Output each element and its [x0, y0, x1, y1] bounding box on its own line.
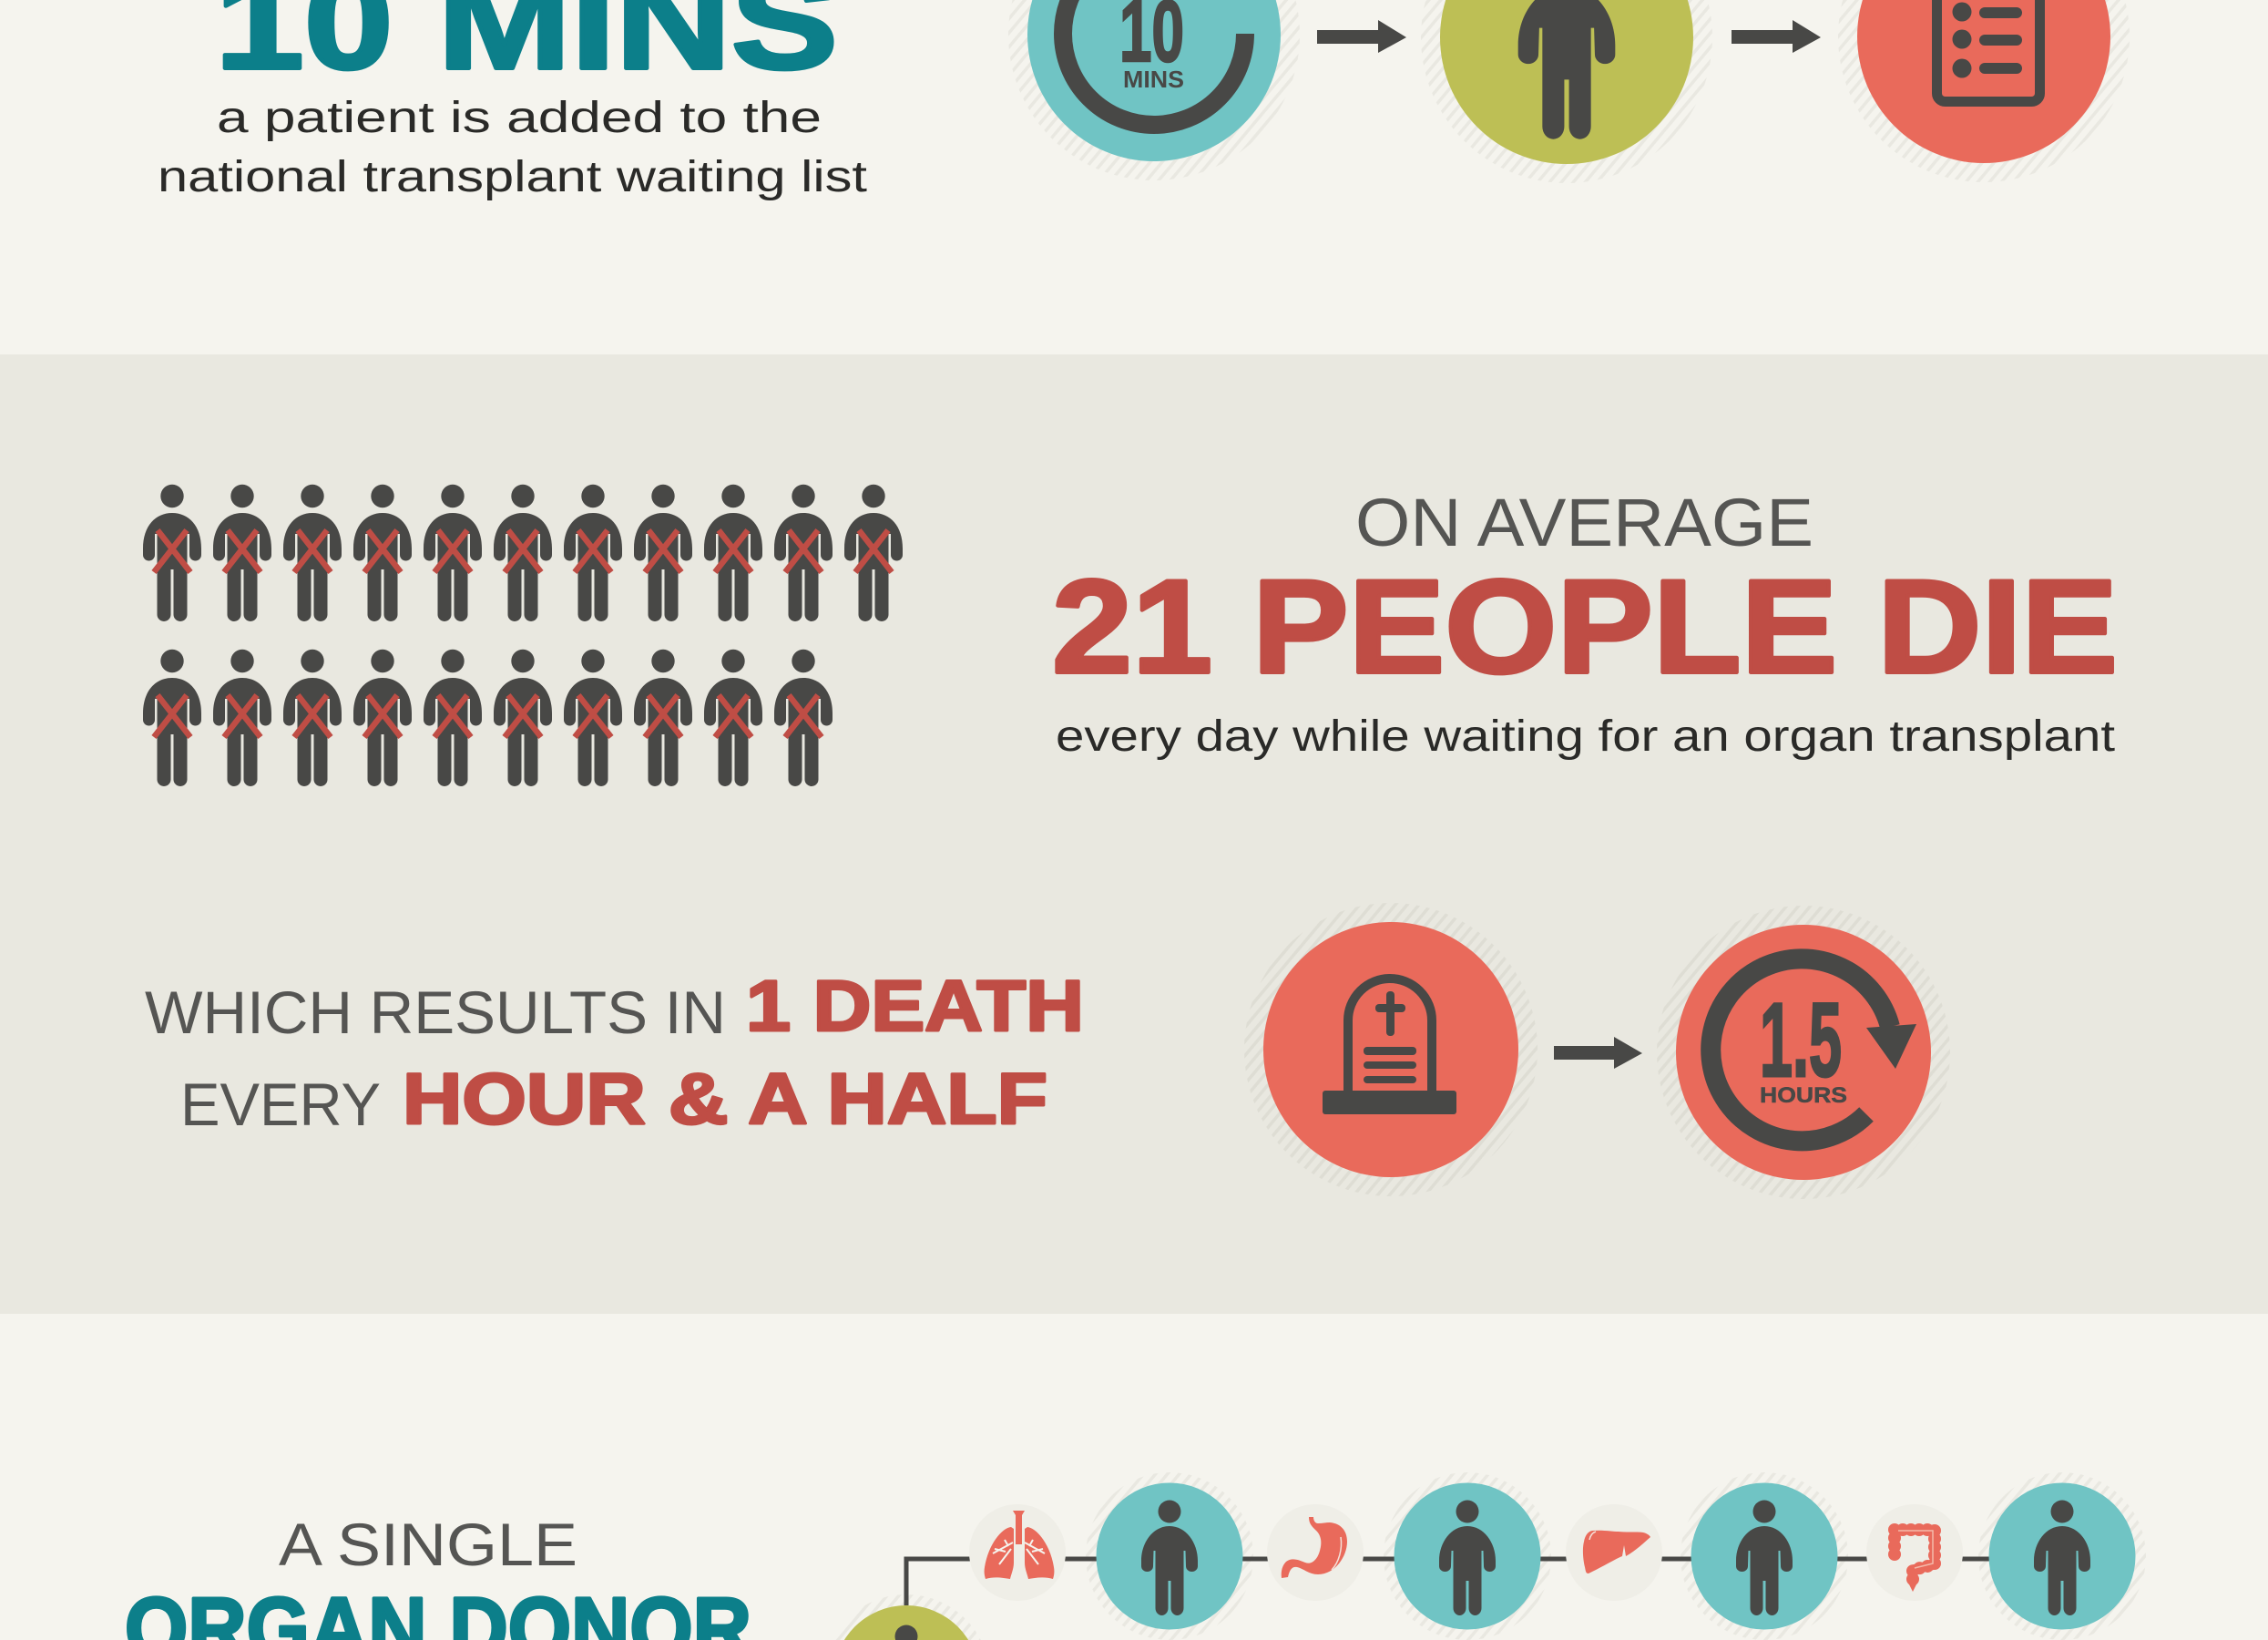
icon: 1.5 hours timer: 1.5	[1760, 982, 1842, 1099]
text: every day while waiting: every day while waiting for an organ transplant	[1056, 712, 2115, 761]
statement: one death every hour and a half: EVERY	[180, 1071, 381, 1138]
icon: stomach	[1267, 1504, 1364, 1601]
icon: liver	[1566, 1504, 1662, 1601]
icon: ten minute clock	[1008, 0, 1300, 180]
icon: recipient 4	[1989, 1483, 2135, 1629]
icon: 1.5 hours timer	[1657, 906, 1950, 1199]
pictogram: 21 people crossed out	[143, 485, 903, 786]
icon: intestine	[1866, 1504, 1963, 1601]
arrow: gravestone to timer	[1554, 1037, 1642, 1069]
hatch shadows: recipients and donor	[822, 1472, 2146, 1640]
section background: waiting list	[0, 0, 2268, 354]
icon: donor	[833, 1605, 979, 1640]
text: on average: ON AVERAGE	[1355, 485, 1813, 560]
icon: patient	[1421, 0, 1712, 183]
icon: 1.5 hours timer: HOURS	[1760, 1083, 1847, 1108]
section background: organ donor	[0, 1314, 2268, 1640]
statement: one death every hour and a half: HOUR & A HALF	[403, 1058, 1047, 1139]
icon: recipient 3	[1691, 1483, 1838, 1629]
statement: one death every hour and a half	[145, 965, 1084, 1139]
icon: recipient 1	[1097, 1483, 1242, 1629]
arrow: clock to patient	[1317, 20, 1406, 53]
statement: one death every hour and a half: 1 DEATH	[746, 965, 1084, 1046]
text: patient added to waiting list: national transplant waiting list	[158, 153, 867, 201]
section background: daily deaths	[0, 354, 2268, 1314]
text: patient added to waiting list	[158, 94, 867, 201]
icon: ten minute clock: MINS	[1123, 66, 1184, 93]
heading: 21 people die: 21 PEOPLE DIE	[1052, 552, 2118, 701]
connector line: donor to recipients	[906, 1559, 2062, 1605]
icon: gravestone	[1244, 903, 1538, 1196]
statement: one death every hour and a half: WHICH RESULTS IN	[145, 979, 726, 1046]
text: a single: A SINGLE	[279, 1511, 577, 1578]
text: patient added to waiting list: a patient is added to the	[217, 94, 822, 142]
icon: lungs	[969, 1504, 1066, 1601]
arrow: patient to list	[1732, 20, 1821, 53]
icon: waiting list clipboard	[1838, 0, 2130, 182]
icon: recipient 2	[1394, 1483, 1541, 1629]
